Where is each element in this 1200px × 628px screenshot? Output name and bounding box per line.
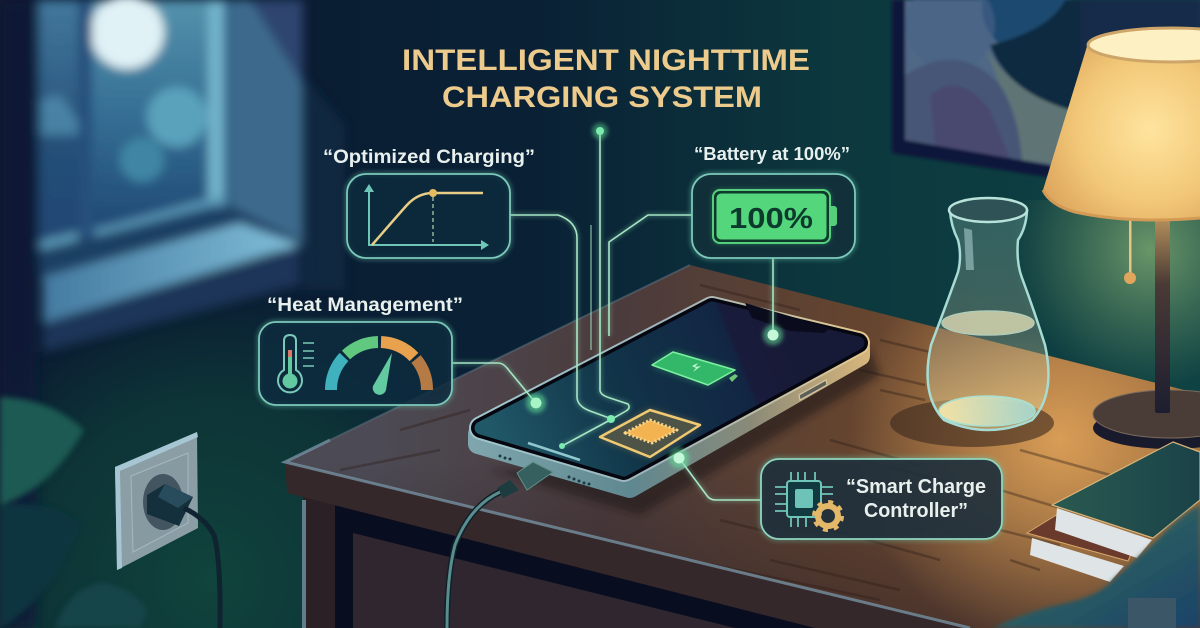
foreground plant lower right: [993, 505, 1200, 628]
connector lines glow: [452, 132, 773, 500]
desk leg: [303, 497, 335, 628]
carafe of water: [890, 198, 1054, 447]
desk: [285, 265, 1200, 628]
panel: optimized charging: “Optimized Charging”: [323, 146, 535, 168]
wall outlet with plug: [115, 432, 220, 628]
phone screen chip: [600, 410, 700, 457]
side button: [799, 380, 827, 400]
title: CHARGING SYSTEM: [442, 81, 762, 114]
panel: smart charge controller: Controller”: [864, 500, 968, 522]
icon: gauge: [331, 342, 427, 395]
lamp: [1043, 28, 1200, 449]
USB connector: [497, 462, 553, 498]
phone notch: [745, 303, 830, 333]
title: [402, 44, 810, 114]
phone frame and screen: [481, 308, 858, 470]
chart: charging curve: [364, 184, 489, 250]
desk base below the top: [303, 495, 970, 628]
framed picture on wall: [892, 0, 1200, 210]
desk front band: [285, 462, 970, 628]
port dots: [498, 454, 590, 486]
panel: heat management: “Heat Management”: [267, 294, 463, 316]
drawer: [353, 533, 735, 628]
icon: full battery: [713, 190, 837, 243]
desk top surface: [285, 265, 1200, 628]
panel: optimized charging: [323, 146, 535, 258]
connector nodes: [526, 123, 783, 468]
icon: full battery: 100%: [729, 203, 813, 235]
left blurred plant leaves: [0, 397, 147, 628]
icon: thermometer: [278, 335, 314, 392]
phone body side: [478, 348, 860, 488]
panel: heat management: [259, 294, 463, 405]
wall recess: [225, 0, 303, 247]
grey corner patch: [1128, 598, 1176, 628]
connector lines: [452, 123, 783, 500]
power cord: [184, 508, 220, 628]
window with moonlight: [0, 0, 345, 628]
phone screen battery icon: [652, 352, 738, 385]
lit wall under the lamp: [1010, 200, 1200, 400]
panel: smart charge controller: “Smart Charge: [846, 476, 986, 498]
charging cable: [447, 492, 500, 628]
panel: smart charge controller: [761, 459, 1002, 539]
phone: [447, 303, 880, 628]
title: INTELLIGENT NIGHTTIME: [402, 44, 810, 77]
panel: battery at 100%: “Battery at 100%”: [694, 143, 850, 164]
home bar: [528, 443, 580, 460]
books: [1027, 442, 1200, 582]
panel: battery at 100%: [692, 143, 855, 258]
icon: processor with gear: [775, 472, 842, 530]
